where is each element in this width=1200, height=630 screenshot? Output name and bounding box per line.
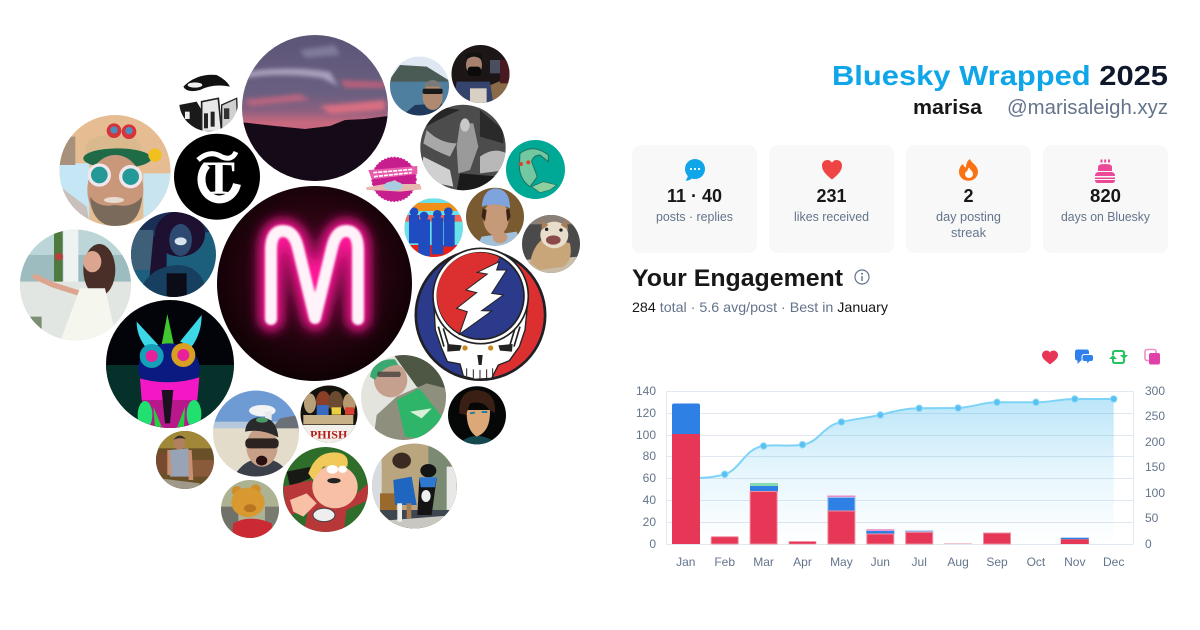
avatar: black and white skeleton bbox=[419, 104, 507, 191]
heading: your engagement: Your Engagement bbox=[632, 265, 843, 292]
avatar: laughing man in blue light bbox=[130, 211, 217, 300]
icon: legend reposts bbox=[1109, 351, 1128, 363]
right axis labels: 0 bbox=[1145, 537, 1152, 551]
month labels: Dec bbox=[1103, 555, 1124, 569]
cumulative line bbox=[686, 396, 1117, 478]
title: Bluesky Wrapped 2025 bbox=[832, 60, 1168, 91]
avatar: man on the beach bbox=[212, 390, 300, 477]
handle: @marisaleigh.xyz bbox=[1007, 97, 1168, 119]
avatar: ink houses bbox=[179, 74, 238, 132]
avatar: party hat man bbox=[57, 113, 173, 228]
grid lines bbox=[666, 391, 1134, 544]
month labels: Apr bbox=[793, 555, 812, 569]
month labels: Mar bbox=[753, 555, 774, 569]
avatar: man sanding wood bbox=[155, 430, 215, 490]
display name: marisa bbox=[913, 97, 983, 119]
avatar: pink starburst stamp bbox=[366, 157, 422, 201]
avatar: man in green shirt bbox=[360, 354, 447, 441]
month labels: Aug bbox=[947, 555, 969, 569]
avatar: Phish cartoon bbox=[299, 385, 358, 443]
panel: days on Bluesky bbox=[1043, 145, 1168, 253]
avatar: Winnie the Pooh bbox=[220, 479, 280, 540]
avatar: teal cartoon creature bbox=[505, 139, 566, 200]
stat value: 231 bbox=[816, 186, 846, 206]
right axis labels: 250 bbox=[1145, 409, 1165, 423]
combo chart: monthly engagement bbox=[636, 384, 1165, 569]
month labels: Jan bbox=[676, 555, 695, 569]
right axis labels: 200 bbox=[1145, 435, 1165, 449]
avatar: New York Times logo: T bbox=[203, 152, 235, 205]
engagement summary: 284 total · 5.6 avg/post · Best in January bbox=[632, 299, 888, 315]
avatar: sunset bbox=[240, 35, 390, 185]
month labels: Nov bbox=[1064, 555, 1085, 569]
avatar: New York Times logo bbox=[174, 134, 260, 220]
month labels: May bbox=[830, 555, 853, 569]
avatar: woman in white dress bbox=[18, 228, 133, 347]
icon: flame bbox=[959, 159, 978, 181]
avatar: masked person bbox=[450, 44, 511, 104]
avatar: neon M bbox=[217, 186, 413, 382]
stacked bars bbox=[672, 404, 1089, 544]
right axis labels: 300 bbox=[1145, 384, 1165, 398]
panel: posts and replies bbox=[632, 145, 757, 253]
avatar: Peter Griffin bbox=[282, 447, 369, 533]
right axis labels: 100 bbox=[1145, 486, 1165, 500]
right axis labels bbox=[1145, 384, 1165, 551]
avatar: man by the sea cliffs bbox=[389, 56, 450, 116]
left axis labels: 40 bbox=[643, 493, 656, 507]
icon: chat bubble bbox=[685, 159, 705, 181]
left axis labels: 20 bbox=[643, 515, 656, 529]
cumulative area bbox=[686, 399, 1114, 544]
icon: legend heart bbox=[1042, 350, 1058, 364]
avatar: surgeon bbox=[465, 187, 525, 247]
stat label: days on Bluesky bbox=[1061, 210, 1151, 224]
left axis labels: 0 bbox=[649, 537, 656, 551]
month labels: Jun bbox=[871, 555, 890, 569]
right axis labels: 150 bbox=[1145, 460, 1165, 474]
avatar: neon owl bbox=[105, 300, 235, 430]
stat value: 820 bbox=[1090, 186, 1121, 206]
stat label: day posting bbox=[936, 210, 1001, 224]
stat label: likes received bbox=[794, 210, 869, 224]
panel: likes received bbox=[769, 145, 894, 253]
month labels: Feb bbox=[714, 555, 735, 569]
icon: heart bbox=[822, 160, 842, 180]
avatar: Grateful Dead Steal Your Face bbox=[414, 248, 546, 381]
avatar: two dogs in a doorway bbox=[372, 443, 458, 529]
stat value: 2 bbox=[963, 186, 974, 206]
stat label second line: streak bbox=[951, 226, 987, 240]
stat value: 11 · 40 bbox=[667, 186, 722, 206]
month labels: Sep bbox=[986, 555, 1008, 569]
left axis labels: 60 bbox=[643, 471, 656, 485]
left axis labels: 80 bbox=[643, 449, 656, 463]
month labels bbox=[676, 555, 1124, 569]
icon: info bbox=[855, 270, 869, 284]
left axis labels: 100 bbox=[636, 428, 656, 442]
icon: cake bbox=[1095, 160, 1115, 183]
avatar: Phish cartoon: PHISH bbox=[310, 428, 348, 442]
avatar: blue band silhouettes bbox=[403, 198, 464, 258]
avatar: painted portrait bbox=[447, 385, 507, 447]
left axis labels: 120 bbox=[636, 406, 656, 420]
avatar: bulldog bbox=[521, 214, 581, 275]
panel: posting streak bbox=[906, 145, 1031, 253]
stat label: posts · replies bbox=[656, 210, 733, 224]
icon: legend quotes bbox=[1145, 350, 1160, 364]
icon: legend replies bbox=[1075, 350, 1094, 364]
left axis labels: 140 bbox=[636, 384, 656, 398]
left axis labels bbox=[636, 384, 656, 551]
month labels: Jul bbox=[912, 555, 927, 569]
legend bbox=[1042, 350, 1160, 364]
avatar bubble cluster bbox=[18, 35, 581, 540]
month labels: Oct bbox=[1027, 555, 1046, 569]
right axis labels: 50 bbox=[1145, 511, 1159, 525]
